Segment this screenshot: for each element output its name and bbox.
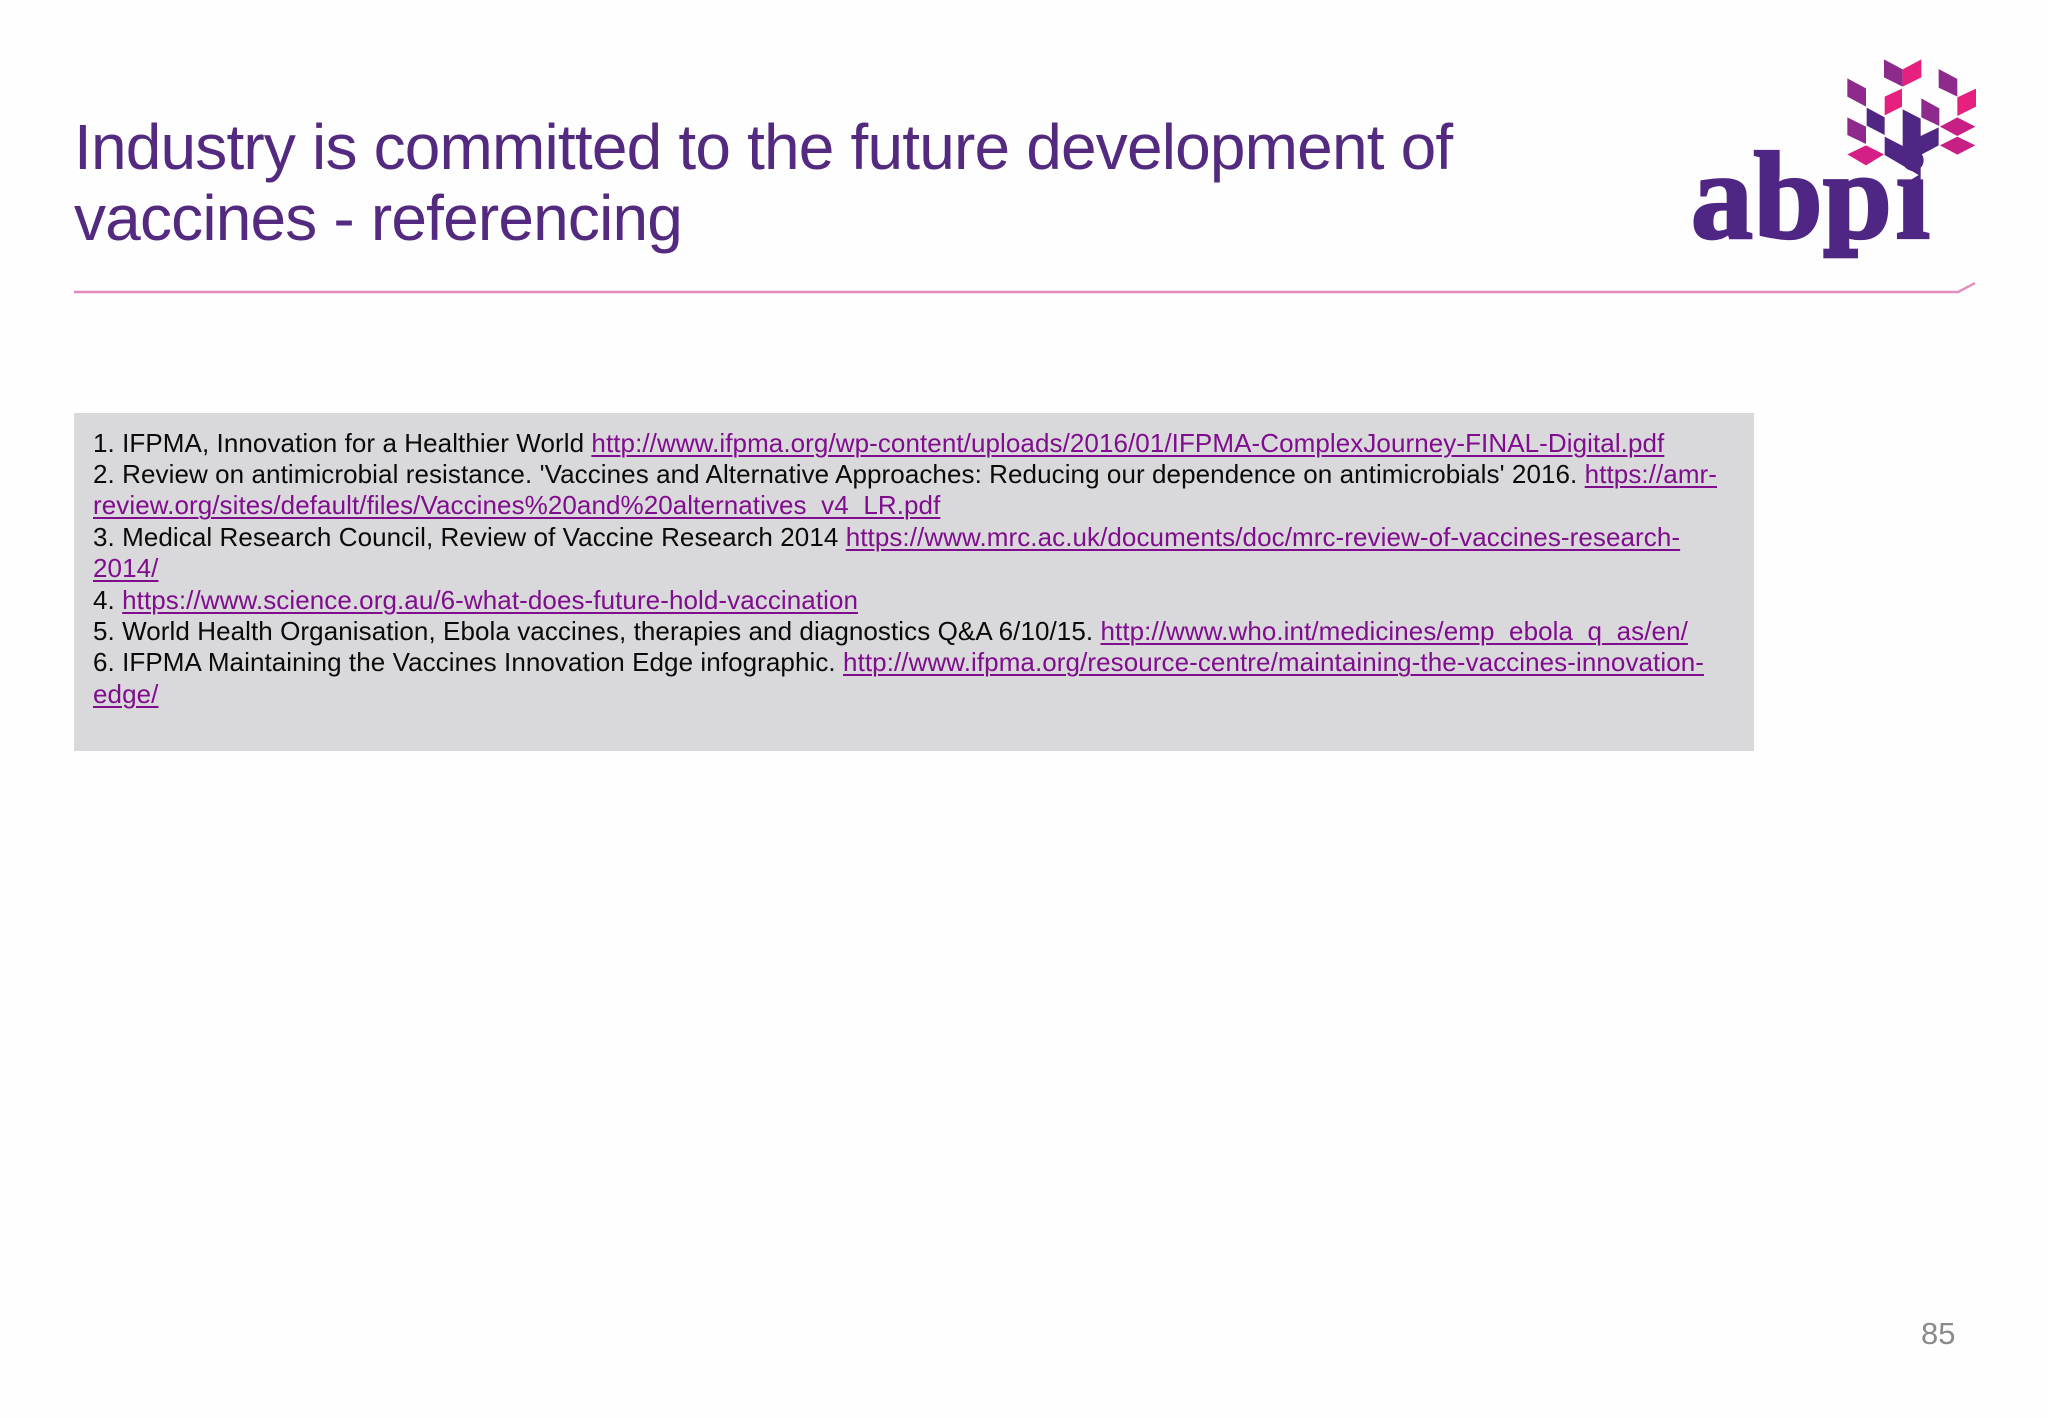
header rule — [74, 282, 1976, 294]
logo: abpi tree — [1691, 59, 1976, 266]
title — [74, 111, 1454, 254]
reference list: edge/ — [93, 679, 158, 709]
reference list — [93, 428, 1718, 709]
reference list: 2. Review on antimicrobial resistance. 'Vaccines and Alternative Approaches: Reducing our dependence on antimicrobials' 2016. https://amr- — [93, 459, 1717, 489]
reference list: 2014/ — [93, 553, 158, 583]
reference list: review.org/sites/default/files/Vaccines%20and%20alternatives_v4_LR.pdf — [93, 490, 940, 520]
title: Industry is committed to the future development of — [74, 111, 1452, 183]
title: vaccines - referencing — [74, 182, 682, 254]
reference list: 3. Medical Research Council, Review of Vaccine Research 2014 https://www.mrc.ac.uk/documents/doc/mrc-review-of-vaccines-research- — [93, 522, 1680, 552]
panel: references — [74, 413, 1754, 751]
reference list: 4. https://www.science.org.au/6-what-does-future-hold-vaccination — [93, 585, 858, 615]
page number: 85 — [1921, 1316, 1955, 1351]
reference list: 5. World Health Organisation, Ebola vaccines, therapies and diagnostics Q&A 6/10/15. http://www.who.int/medicines/emp_ebola_q_as/en/ — [93, 616, 1688, 646]
reference list: 1. IFPMA, Innovation for a Healthier World http://www.ifpma.org/wp-content/uploads/2016/01/IFPMA-ComplexJourney-FINAL-Digital.pdf — [93, 428, 1664, 458]
reference list: 6. IFPMA Maintaining the Vaccines Innovation Edge infographic. http://www.ifpma.org/resource-centre/maintaining-the-vaccines-innovation- — [93, 647, 1704, 677]
logo: abpi tree: abpi — [1691, 128, 1930, 266]
